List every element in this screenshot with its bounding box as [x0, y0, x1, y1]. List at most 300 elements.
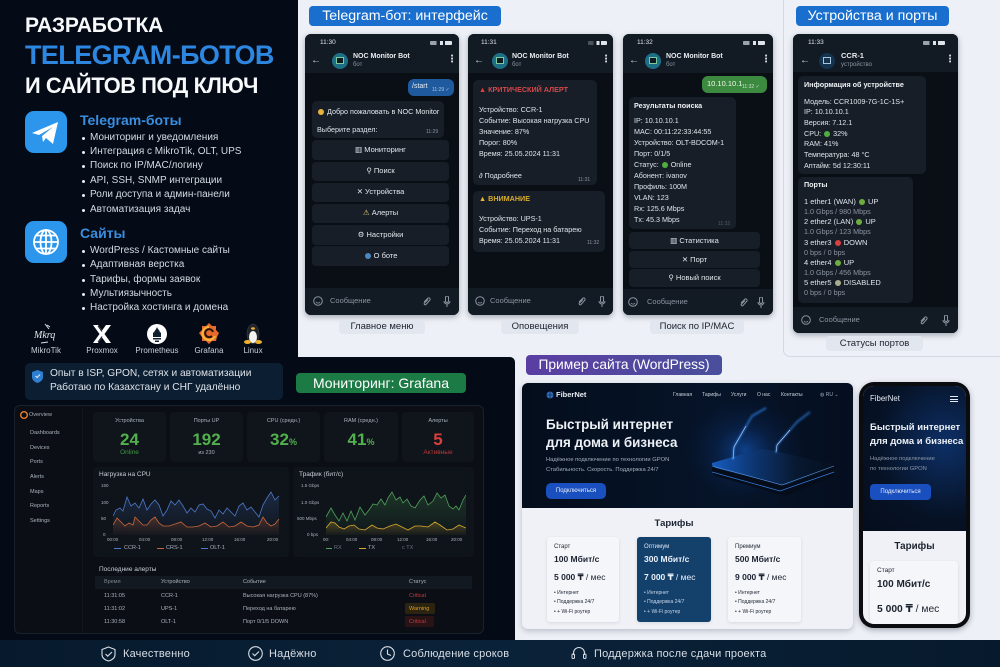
stat: alerts: Алерты [428, 418, 448, 424]
callout: experience [25, 363, 283, 400]
stat: devices: Online [120, 449, 139, 456]
mobile hero [863, 386, 966, 531]
table: latest alerts: Последние алерты [99, 566, 156, 573]
message input [475, 296, 606, 307]
sidebar: Alerts [30, 474, 44, 480]
tariff: start: 5 000 ₸ / мес [554, 572, 605, 582]
badge: website example [526, 355, 722, 375]
bubble: warning: Время: 25.05.2024 11:31 [479, 236, 560, 245]
hero: Стабильность. Скорость. Поддержка 24/7 [546, 467, 659, 473]
table: latest alerts [95, 566, 472, 627]
tariff: optimum: • Поддержка 24/7 [644, 599, 684, 605]
menu buttons: ⚠ Алерты [363, 208, 398, 217]
tariff: premium: • Поддержка 24/7 [735, 599, 775, 605]
nav [546, 390, 839, 399]
bubble: critical alert: ∂ Подробнее [479, 171, 522, 180]
chart: traffic: 500 Mbps [297, 516, 317, 521]
tariff: start: • Интернет [554, 590, 579, 596]
menu buttons: ⚲ Поиск [366, 166, 395, 175]
bubble: search results: Rx: 125.6 Mbps [634, 204, 684, 213]
chart: cpu load: 00:00 [107, 537, 118, 542]
mobile hero: Быстрый интернет [870, 422, 960, 433]
mobile hero: по технологии GPON [870, 466, 927, 472]
bubble: search results: IP: 10.10.10.1 [634, 116, 679, 125]
bubble: search results: VLAN: 123 [634, 193, 669, 202]
tariff: start: Старт [554, 544, 570, 550]
bubble: critical alert: Значение: 87% [479, 127, 529, 136]
list: telegram features: Мониторинг и уведомления [90, 132, 218, 143]
bubble: device info: RAM: 41% [804, 139, 838, 148]
heading: tariffs: Тарифы [655, 518, 693, 529]
label: notifications: Оповещения [512, 321, 568, 332]
sidebar [15, 406, 83, 633]
list: site features: Настройка хостинга и домена [90, 302, 228, 313]
message input [313, 296, 450, 307]
bubble: warning: ▲ ВНИМАНИЕ [479, 194, 530, 203]
bubble: device info: Информация об устройстве [804, 80, 904, 89]
message input: Сообщение [330, 296, 371, 305]
message input: Сообщение [819, 315, 860, 324]
chart: cpu load: 150 [101, 483, 109, 488]
list: site features: Адаптивная верстка [90, 259, 184, 270]
tariff: optimum: 300 Мбит/с [644, 554, 689, 564]
title: РАЗРАБОТКА [25, 14, 163, 37]
bubble: search results: Tx: 45.3 Mbps [634, 215, 680, 224]
phone: main menu: NOC Monitor Bot [353, 53, 410, 60]
table: latest alerts: Статус [409, 579, 426, 585]
label: main menu: Главное меню [350, 321, 414, 332]
chart: cpu load: 50 [101, 516, 106, 521]
bubble: warning: Событие: Переход на батарею [479, 225, 582, 234]
badge: website example: Пример сайта (WordPress) [538, 357, 710, 372]
tariff: premium [728, 537, 801, 622]
heading: sites: Сайты [80, 225, 126, 241]
chart: traffic: 04:00 [346, 537, 357, 542]
bubble: critical alert: Порог: 80% [479, 138, 517, 147]
tariff: optimum: • Интернет [644, 590, 669, 596]
bubble: ports: 1 ether1 (WAN) UP [804, 197, 878, 206]
bubble: ip query [702, 76, 767, 93]
label: notifications [501, 320, 579, 334]
logo: MikroTik [31, 324, 61, 355]
bubble: ports: Порты [804, 180, 828, 189]
tariff: start [547, 537, 619, 622]
message input [801, 315, 950, 326]
bubble: ports: 1.0 Gbps / 456 Mbps [804, 268, 871, 277]
panel: grafana dashboard [14, 405, 484, 634]
tariff: optimum [637, 537, 711, 622]
bubble: ports: 5 ether5 DISABLED [804, 278, 881, 287]
chart: traffic: 0 bps [307, 532, 318, 537]
chart: cpu load: Нагрузка на CPU [99, 471, 151, 478]
table: latest alerts: CCR-1 [161, 593, 178, 599]
bubble: device info: Версия: 7.12.1 [804, 118, 852, 127]
label: port statuses: Статусы портов [840, 338, 909, 349]
bubble: ip query: 11:32 ✓ [742, 84, 760, 90]
mobile tariff card: 100 Мбит/с [877, 579, 930, 590]
logo: Grafana [194, 323, 224, 355]
mobile heading: tariffs: Тарифы [894, 541, 935, 552]
chart: cpu load: 0 [103, 532, 106, 537]
bubble: search results: MAC: 00:11:22:33:44:55 [634, 127, 711, 136]
bubble: search results: Порт: 0/1/5 [634, 149, 670, 158]
logo: Prometheus: Prometheus [135, 346, 179, 355]
bubble: search results: Профиль: 100M [634, 182, 687, 191]
chart: cpu load: 08:00 [171, 537, 182, 542]
title: И САЙТОВ ПОД КЛЮЧ [25, 73, 258, 98]
nav: Главная [673, 392, 692, 398]
sidebar: Overview [29, 412, 52, 418]
search buttons: ✕ Порт [682, 255, 707, 264]
badge: grafana [296, 373, 466, 393]
phone: port statuses: 11:33 [808, 39, 824, 46]
list: telegram features: Интеграция с MikroTik, OLT, UPS [90, 146, 241, 157]
icon: shield [32, 370, 43, 383]
bubble: ports: 0 bps / 0 bps [804, 248, 845, 257]
bubble: search results [629, 97, 736, 229]
chart: traffic: 20:00 [451, 537, 462, 542]
bubble: search results: Устройство: OLT-BDCOM-1 [634, 138, 724, 147]
bubble: ports: 2 ether2 (LAN) UP [804, 217, 876, 226]
message input [628, 297, 764, 308]
title: TELEGRAM-БОТОВ [25, 40, 274, 70]
menu buttons: ⚙ Настройки [358, 230, 403, 239]
menu buttons [312, 140, 449, 266]
phone: port statuses: ⋮ [945, 54, 955, 65]
chart: cpu load: 100 [101, 500, 109, 505]
sidebar: Reports [30, 503, 49, 509]
bubble: critical alert: ▲ КРИТИЧЕСКИЙ АЛЕРТ [479, 85, 568, 94]
mobile tariff card: 5 000 ₸ / мес [877, 604, 939, 615]
stat: alerts [402, 412, 474, 462]
label: search: Поиск по IP/MAC [660, 321, 734, 332]
list: telegram features: Поиск по IP/MAC/логину [90, 160, 203, 171]
bubble: search results: Абонент: ivanov [634, 171, 687, 180]
sidebar: Ports [30, 459, 43, 465]
callout: experience: Опыт в ISP, GPON, сетях и автоматизации [50, 368, 251, 379]
bubble: device info: CPU: 32% [804, 129, 848, 138]
table: latest alerts: 11:31:02 [104, 606, 125, 612]
hero text: Надёжное подключение по технологии GPON [546, 457, 669, 463]
bubble: search results: Статус: Online [634, 160, 692, 169]
chart: traffic: Трафик (бит/с) [299, 471, 343, 478]
bubble: start: /start [412, 83, 428, 90]
phone: notifications: 11:31 [481, 39, 497, 46]
illustration: router [700, 406, 834, 495]
avatar [645, 53, 661, 69]
tariff: premium: • + Wi-Fi роутер [735, 609, 771, 615]
stat: ports: из 230 [198, 450, 215, 456]
label: main menu [339, 320, 425, 334]
footer: reliable: Надёжно [269, 648, 317, 660]
footer: support: Поддержка после сдачи проекта [594, 648, 766, 660]
icon: globe [25, 221, 67, 263]
nav: ◍ RU ⌄ [820, 392, 839, 398]
bubble: critical alert: Событие: Высокая нагрузка CPU [479, 116, 589, 125]
nav: Контакты [781, 392, 803, 398]
stat: alerts: Активные [423, 449, 453, 456]
table: latest alerts: Порт 0/1/5 DOWN [243, 619, 288, 625]
stat: ports: 192 [192, 430, 221, 449]
bubble: ports: 0 bps / 0 bps [804, 288, 845, 297]
tariff: start: 100 Мбит/с [554, 554, 599, 564]
phone: port statuses: CCR-1 [841, 51, 864, 60]
chart: traffic: TX [368, 545, 375, 551]
phone: port statuses [793, 34, 958, 333]
bubble: warning [473, 191, 605, 252]
nav: Тарифы [702, 392, 721, 398]
tariff: start: • Поддержка 24/7 [554, 599, 594, 605]
bubble: device info: Температура: 48 °C [804, 150, 870, 159]
badge: devices and ports: Устройства и порты [808, 8, 937, 24]
search buttons: ▥ Статистика [670, 236, 719, 245]
chart: traffic: 08:00 [371, 537, 382, 542]
tariff: premium: Премиум [735, 544, 761, 550]
phone: search: NOC Monitor Bot [666, 53, 723, 60]
phone: search: ⋮ [761, 54, 771, 65]
bubble: device info: IP: 10.10.10.1 [804, 107, 849, 116]
chart: traffic: 1.0 Gbps [301, 500, 319, 505]
chart: cpu load: 12:00 [202, 537, 213, 542]
bubble: welcome [312, 101, 444, 138]
table: latest alerts: Warning [409, 606, 429, 612]
phone: notifications [468, 34, 613, 315]
panel: light background [298, 0, 1000, 640]
mobile tariff card: Старт [877, 567, 895, 574]
sidebar: Settings [30, 518, 50, 524]
logo: Proxmox: Proxmox [86, 346, 118, 355]
mobile hero: FiberNet [870, 394, 900, 403]
avatar [819, 53, 835, 69]
search buttons: ⚲ Новый поиск [668, 273, 721, 282]
chart: traffic: RX [334, 545, 342, 551]
bubble: device info: Аптайм: 5d 12:30:11 [804, 161, 870, 170]
footer: reliable [248, 646, 317, 661]
chart: traffic: 00: [323, 537, 329, 542]
phone: notifications: бот [512, 62, 521, 68]
stat: devices: 24 [120, 430, 139, 449]
bubble: ports: 3 ether3 DOWN [804, 238, 867, 247]
list: telegram features: API, SSH, SNMP интеграции [90, 175, 222, 186]
table: latest alerts: Переход на батарею [243, 606, 296, 612]
chart: cpu load: 04:00 [139, 537, 150, 542]
icon: menu [950, 396, 958, 402]
stat: devices: Устройства [115, 418, 144, 424]
tariff: premium: 9 000 ₸ / мес [735, 572, 786, 582]
mobile button [870, 484, 931, 500]
chart: traffic: с ТХ [402, 545, 413, 551]
hero button [546, 483, 606, 499]
stat: cpu: CPU (средн.) [267, 418, 300, 424]
chart: traffic: 1.5 Gbps [301, 483, 319, 488]
nav: Услуги [731, 392, 746, 398]
phone: main menu: ⋮ [447, 54, 457, 65]
label: search [650, 320, 744, 334]
phone: main menu: бот [353, 62, 362, 68]
hero button: Подключиться [556, 488, 596, 494]
logo: Linux [243, 324, 263, 355]
chart: traffic: 16:00 [426, 537, 437, 542]
callout: experience: Работаю по Казахстану и СНГ удалённо [50, 382, 240, 393]
avatar [492, 53, 508, 69]
chart: cpu load: 16:00 [234, 537, 245, 542]
bubble: critical alert: Время: 25.05.2024 11:31 [479, 149, 560, 158]
icon: grafana small [20, 411, 28, 419]
mobile screen [863, 386, 966, 624]
list: site features [82, 245, 230, 313]
phone: notifications: ← [474, 55, 484, 66]
stat: cpu [247, 412, 320, 462]
table: latest alerts: Время [104, 579, 121, 585]
bubble: ports: 4 ether4 UP [804, 258, 854, 267]
tariff: premium: • Интернет [735, 590, 760, 596]
phone: main menu: 11:30 [320, 39, 336, 46]
phone: port statuses: ← [800, 55, 810, 66]
sidebar: Dashboards [30, 430, 60, 436]
mobile hero: для дома и бизнеса [870, 436, 963, 447]
icon: telegram [25, 111, 67, 153]
heading: telegram bots: Telegram-боты [80, 112, 182, 128]
bubble: warning: 11:32 [587, 240, 599, 246]
nav: О нас [757, 392, 770, 398]
table: latest alerts: UPS-1 [161, 606, 177, 612]
mobile button: Подключиться [880, 489, 921, 495]
menu buttons: ▥ Мониторинг [355, 145, 406, 154]
list: telegram features: Роли доступа и админ-панели [90, 189, 230, 200]
bubble: critical alert: Устройство: CCR-1 [479, 105, 543, 114]
bubble: ports: 1.0 Gbps / 123 Mbps [804, 227, 871, 236]
avatar [332, 53, 348, 69]
panel: desktop website [522, 383, 853, 629]
stat: ram [324, 412, 398, 462]
dark notch of the lower left area [298, 357, 515, 640]
chart: cpu load: OLT-1 [210, 545, 225, 551]
phone: search [623, 34, 773, 315]
phone: search: бот [666, 62, 675, 68]
mobile tariff card [870, 561, 958, 624]
table: latest alerts: Устройство [161, 579, 190, 585]
stat: ram: 41% [348, 430, 374, 449]
title [25, 14, 274, 98]
logo: Prometheus [135, 324, 179, 355]
panel: devices frame [783, 0, 1000, 357]
footer: deadlines [380, 646, 509, 661]
logo: Linux: Linux [243, 346, 263, 355]
badge: grafana: Мониторинг: Grafana [313, 375, 449, 391]
list: site features: Тарифы, формы заявок [90, 274, 200, 285]
bubble: ports [798, 177, 913, 303]
message input: Сообщение [647, 297, 688, 306]
bubble: device info: Модель: CCR1009-7G-1C-1S+ [804, 97, 904, 106]
message input: Сообщение [490, 296, 531, 305]
stat: alerts: 5 [433, 430, 443, 449]
menu buttons: О боте [374, 251, 397, 260]
bubble: ports: 1.0 Gbps / 980 Mbps [804, 207, 871, 216]
badge: telegram interface: Telegram-бот: интерфейс [322, 8, 488, 24]
list: telegram features [82, 132, 241, 215]
bubble: welcome: Добро пожаловать в NOC Monitor [327, 107, 439, 116]
bubble: welcome: 11:29 [426, 129, 438, 135]
label: port statuses [826, 336, 923, 351]
bubble: search results: 11:32 [718, 221, 730, 227]
logo: Grafana: Grafana [195, 346, 223, 355]
sidebar: Devices [30, 445, 50, 451]
footer band [0, 640, 1000, 667]
table: latest alerts: OLT-1 [161, 619, 176, 625]
nav: FiberNet [556, 390, 586, 399]
chart: traffic [293, 467, 474, 557]
chart: cpu load: CRS-1 [166, 545, 183, 551]
phone: search: 11:32 [637, 39, 653, 46]
phone: search: ← [629, 55, 639, 66]
table: latest alerts: Событие [243, 579, 266, 585]
table: latest alerts: Высокая нагрузка CPU (87%) [243, 593, 318, 599]
phone: mobile website [859, 382, 970, 628]
stat: cpu: 32% [270, 430, 297, 449]
table: latest alerts: Critical [409, 619, 426, 625]
table: latest alerts: 11:31:05 [104, 593, 125, 599]
stat: devices [93, 412, 166, 462]
tariff: optimum: Оптимум [644, 544, 669, 550]
phone: main menu: ← [311, 55, 321, 66]
bubble: ip query: 10.10.10.1 [707, 79, 742, 88]
phone: port statuses: устройство [841, 62, 872, 68]
footer: quality [101, 646, 190, 662]
bubble: warning: Устройство: UPS-1 [479, 214, 542, 223]
stat: ram: RAM (средн.) [344, 418, 378, 424]
bubble: start [408, 79, 454, 96]
table: latest alerts: 11:30:58 [104, 619, 125, 625]
search buttons [629, 232, 760, 287]
bubble: critical alert [473, 80, 597, 185]
list: site features: WordPress / Кастомные сайты [90, 245, 230, 256]
phone: main menu [305, 34, 459, 315]
stat: ports [170, 412, 243, 462]
phone: notifications: ⋮ [601, 54, 611, 65]
sidebar: Maps [30, 489, 43, 495]
footer: quality: Качественно [123, 648, 190, 660]
hero: для дома и бизнеса [546, 435, 677, 450]
bubble: device info [798, 76, 926, 174]
phone: notifications: NOC Monitor Bot [512, 53, 569, 60]
chart: cpu load: CCR-1 [124, 545, 141, 551]
tariff: premium: 500 Мбит/с [735, 554, 780, 564]
chart: cpu load: 20:00 [267, 537, 278, 542]
badge: devices and ports [796, 6, 949, 26]
bubble: welcome: Выберите раздел: [317, 125, 377, 134]
mobile hero: Надёжное подключение [870, 456, 935, 462]
logo: MikroTik: Mkrq [33, 330, 55, 341]
footer: deadlines: Соблюдение сроков [403, 648, 509, 660]
tariff: optimum: 7 000 ₸ / мес [644, 572, 695, 582]
tariff: start: • + Wi-Fi роутер [554, 609, 590, 615]
tariff: optimum: • + Wi-Fi роутер [644, 609, 680, 615]
logo: Proxmox [86, 325, 118, 355]
chart: traffic: 12:00 [397, 537, 408, 542]
logos row [31, 323, 263, 355]
stat: ports: Порты UP [194, 418, 219, 424]
bubble: critical alert: 11:31 [578, 177, 590, 183]
table: latest alerts: Critical [409, 593, 426, 599]
hero [522, 383, 853, 508]
menu buttons: ✕ Устройства [357, 187, 404, 196]
bubble: start: 11:29 ✓ [432, 87, 450, 93]
chart: cpu load [93, 467, 289, 557]
bubble: search results: Результаты поиска [634, 101, 702, 110]
hero heading: Быстрый интернет [546, 417, 673, 432]
badge: telegram interface [309, 6, 501, 26]
list: site features: Мультиязычность [90, 288, 172, 299]
